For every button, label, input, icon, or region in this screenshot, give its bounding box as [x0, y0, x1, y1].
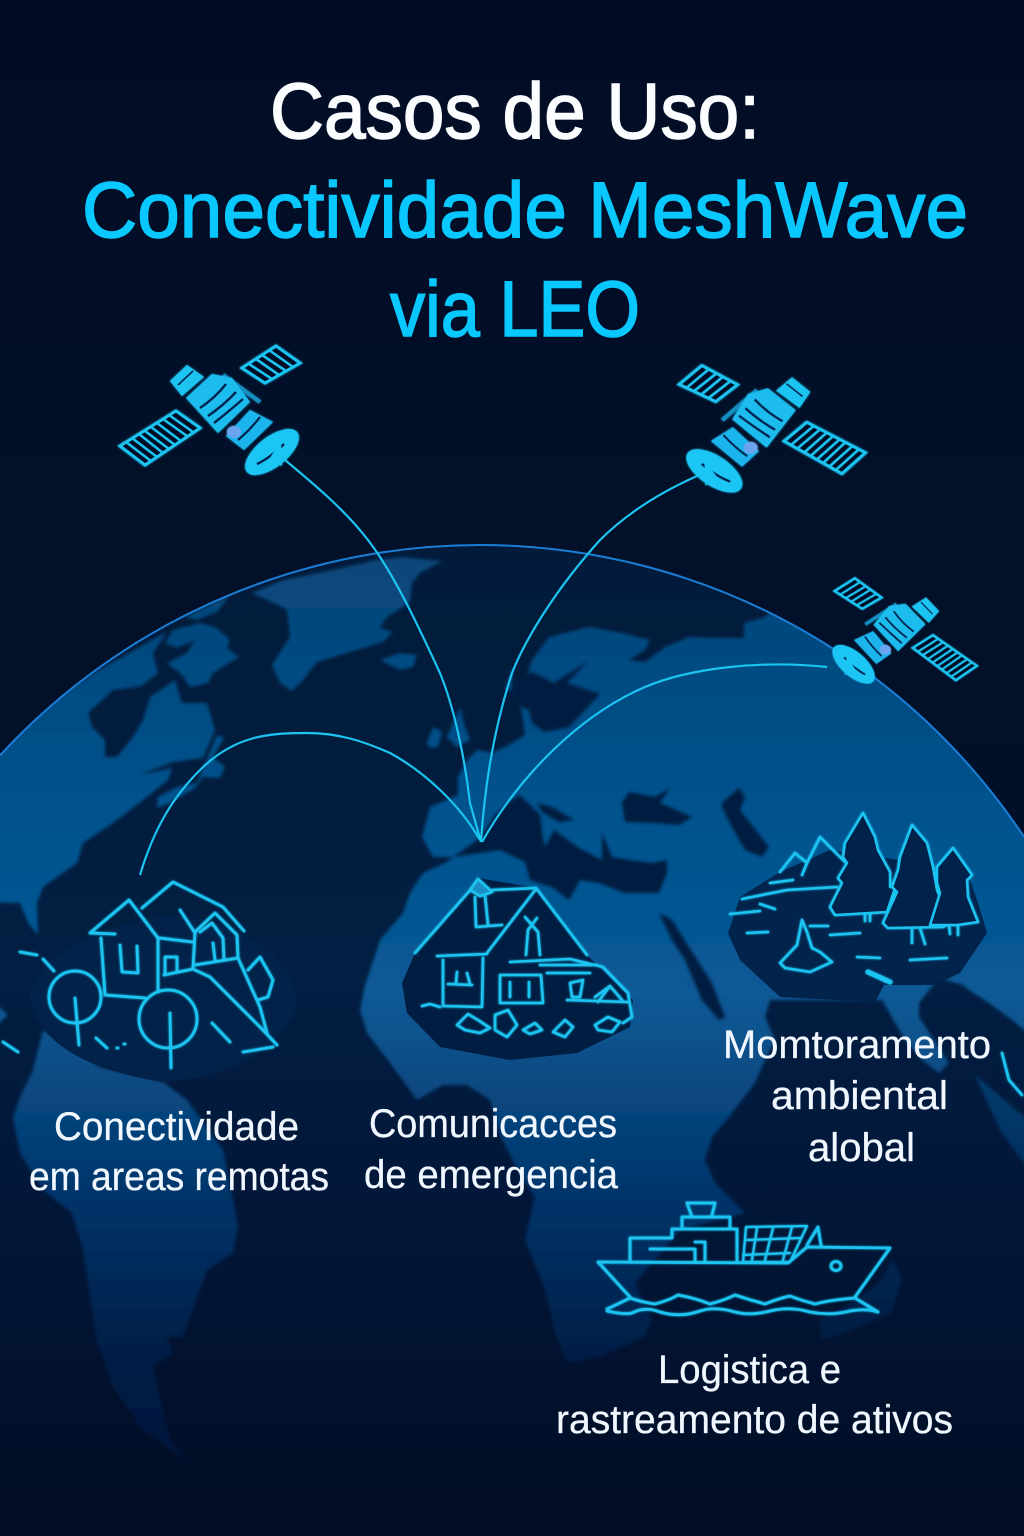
globe — [0, 545, 1024, 1536]
icon: house and vehicle — [415, 879, 632, 1037]
satellite 3 — [824, 577, 981, 696]
label: logistics: rastreamento de ativos — [556, 1398, 953, 1442]
satellite 2 — [671, 353, 868, 505]
title line 3: via LEO — [390, 264, 640, 353]
globe rim — [0, 545, 1024, 837]
label: emergency communications: de emergencia — [364, 1153, 619, 1197]
label: logistics: Logistica e — [658, 1348, 841, 1392]
satellite 1 — [120, 346, 306, 484]
seas — [454, 662, 770, 1022]
label: environmental monitoring: ambiental — [771, 1074, 948, 1118]
label: emergency communications: Comunicacces — [369, 1102, 617, 1146]
icon: forest and lake — [730, 813, 1022, 1095]
signal arcs — [140, 460, 827, 875]
label: environmental monitoring — [723, 1023, 991, 1170]
label: environmental monitoring: Momtoramento — [723, 1023, 991, 1067]
title — [82, 66, 968, 353]
label: environmental monitoring: alobal — [808, 1126, 915, 1170]
title line 2: Conectividade MeshWave — [82, 165, 968, 254]
label: logistics — [556, 1348, 953, 1442]
title line 1: Casos de Uso: — [270, 66, 760, 155]
world map landmasses — [0, 557, 1024, 1463]
icon: houses and trees — [3, 882, 277, 1068]
label: remote areas — [29, 1105, 329, 1199]
label: remote areas: Conectividade — [54, 1105, 299, 1149]
label: remote areas: em areas remotas — [29, 1155, 329, 1199]
icon backdrops — [30, 850, 987, 1082]
icon: cargo ship — [598, 1203, 890, 1315]
Eurasia and Africa — [360, 590, 1024, 1363]
label: emergency communications — [364, 1102, 619, 1197]
